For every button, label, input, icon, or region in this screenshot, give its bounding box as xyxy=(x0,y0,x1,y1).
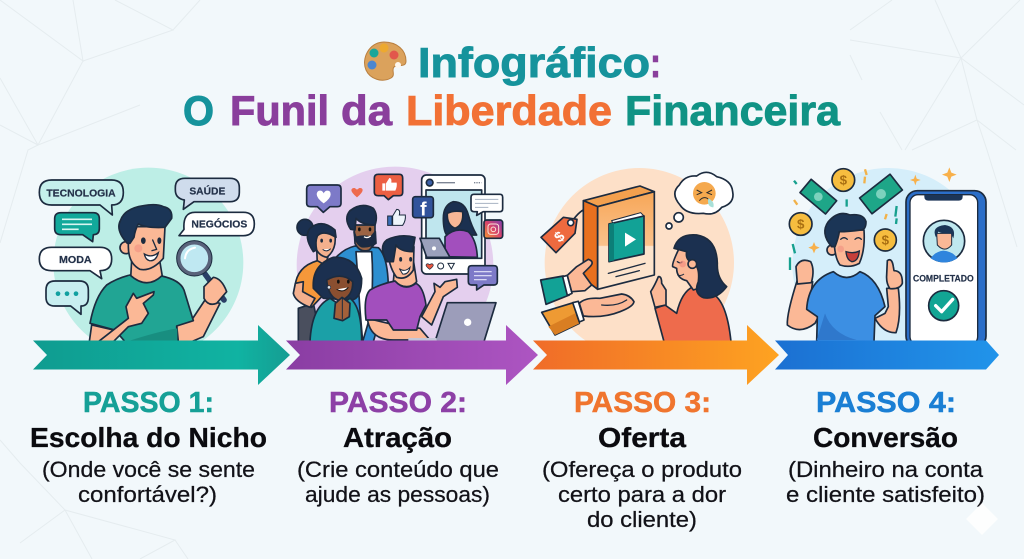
arrow: passo 2 xyxy=(286,325,538,385)
arrow: passo 1 xyxy=(33,325,290,385)
money rain xyxy=(789,167,957,270)
text block: passo 1: confortável?) xyxy=(78,482,217,507)
text block: passo 3: certo para a dor xyxy=(558,482,726,507)
speech bubble: tecnologia xyxy=(39,180,123,215)
text block: passo 4: PASSO 4: xyxy=(816,387,956,419)
text block: passo 2: Atração xyxy=(343,422,452,453)
happy man xyxy=(787,213,902,342)
book with play button xyxy=(609,213,644,262)
dollar bills xyxy=(800,174,902,214)
arrow: passo 4 xyxy=(775,340,999,370)
icon: small heart xyxy=(351,188,363,197)
completado label: COMPLETADO xyxy=(913,273,974,283)
icon: thumb bubble xyxy=(374,174,403,200)
dollar coins xyxy=(789,169,896,251)
emoji: pained face xyxy=(693,182,716,207)
text block: passo 1: Escolha do Nicho xyxy=(30,422,267,453)
woman in post xyxy=(420,202,477,257)
dollar coins: $ xyxy=(882,233,890,248)
group of people xyxy=(293,205,496,342)
title xyxy=(183,39,841,134)
title line 2 xyxy=(183,87,841,134)
title line 2: Funil xyxy=(230,87,329,134)
confetti and sparkles xyxy=(790,167,957,270)
dollar coins: $ xyxy=(797,217,805,232)
text block: passo 3: do cliente) xyxy=(587,507,697,532)
text block: passo 2: PASSO 2: xyxy=(329,387,467,419)
icon: facebook xyxy=(413,197,433,221)
smartphone xyxy=(906,191,986,347)
neck and arms xyxy=(131,258,163,285)
panel: passo 2 illustration xyxy=(293,167,503,363)
social post card xyxy=(420,175,485,274)
face xyxy=(141,237,146,244)
speech bubble: negócios: NEGÓCIOS xyxy=(191,218,247,231)
hair xyxy=(119,205,172,243)
head xyxy=(120,242,132,254)
comment bubble purple xyxy=(468,266,497,290)
title line 1: Infográfico xyxy=(418,39,650,86)
speech bubble: saúde: SAÚDE xyxy=(189,184,225,197)
speech bubble: negócios xyxy=(179,212,254,236)
giving hand xyxy=(541,259,592,304)
arrow: passo 3 xyxy=(533,325,779,385)
icon: instagram xyxy=(484,220,503,238)
receiving hand xyxy=(542,294,634,335)
text block: passo 3 xyxy=(542,387,742,532)
head xyxy=(827,245,837,255)
woman with bun xyxy=(293,219,336,342)
title line 2: O xyxy=(183,87,214,134)
magnifier xyxy=(177,241,227,304)
woman thinking xyxy=(651,235,731,342)
laptop xyxy=(408,303,496,342)
icon: artist palette xyxy=(365,42,406,80)
speech bubble: tecnologia: TECNOLOGIA xyxy=(46,188,116,199)
text block: passo 3: Oferta xyxy=(598,422,686,453)
teal circle backdrop xyxy=(53,168,243,358)
icon: price tag xyxy=(541,209,587,253)
text block: passo 4: (Dinheiro na conta xyxy=(788,457,984,482)
raised fist xyxy=(796,260,813,284)
title line 2: Financeira xyxy=(625,87,841,134)
text block: passo 4: Conversão xyxy=(813,422,958,453)
text block: passo 2: ajude as pessoas) xyxy=(305,482,490,507)
pointing hand xyxy=(98,292,154,342)
woman with afro xyxy=(310,257,362,342)
icon: facebook: f xyxy=(420,200,427,221)
man with magnifier xyxy=(89,205,227,342)
icon: price tag: $ xyxy=(552,229,568,246)
speech bubble: dots xyxy=(46,281,88,314)
post actions xyxy=(426,264,433,269)
panel: passo 4 illustration xyxy=(787,167,986,360)
icon: blue thumb xyxy=(388,209,405,225)
text block: passo 1 xyxy=(30,387,267,507)
arms xyxy=(787,280,820,330)
panel: passo 3 illustration xyxy=(541,168,734,357)
profile avatar xyxy=(923,220,965,262)
panel: passo 1 illustration xyxy=(39,168,254,358)
text block: passo 4: e cliente satisfeito) xyxy=(786,482,985,507)
text block: passo 2: (Crie conteúdo que xyxy=(297,457,499,482)
comment bubble white xyxy=(471,194,503,215)
text block: passo 4 xyxy=(786,387,985,507)
product box xyxy=(583,186,654,289)
icon: corner sparkle xyxy=(966,503,998,535)
icon: heart bubble xyxy=(307,185,341,212)
speech bubble: saúde xyxy=(175,178,239,209)
text block: passo 1: (Onde você se sente xyxy=(42,457,255,482)
speech bubble: moda: MODA xyxy=(59,255,92,266)
text block: passo 3: PASSO 3: xyxy=(574,387,711,419)
shirt xyxy=(90,275,193,342)
peach circle backdrop xyxy=(545,168,734,357)
title line 2: da xyxy=(341,87,393,134)
text block: passo 2 xyxy=(297,387,499,507)
text block: passo 1: PASSO 1: xyxy=(83,387,214,419)
purple circle backdrop xyxy=(297,167,493,363)
dollar coins: $ xyxy=(840,173,848,188)
title line 1: : xyxy=(650,39,661,86)
speech bubble: message lines xyxy=(55,213,99,242)
bearded man xyxy=(337,205,388,342)
man with purple shirt xyxy=(365,236,457,340)
speech bubble: moda xyxy=(39,247,112,279)
shirt xyxy=(807,272,885,342)
thumbs up hand xyxy=(887,260,902,289)
check badge xyxy=(929,291,959,321)
blue circle backdrop xyxy=(792,168,984,360)
thought cloud xyxy=(666,172,733,229)
text block: passo 3: (Ofereça o produto xyxy=(542,457,742,482)
title line 2: Liberdade xyxy=(406,87,612,134)
